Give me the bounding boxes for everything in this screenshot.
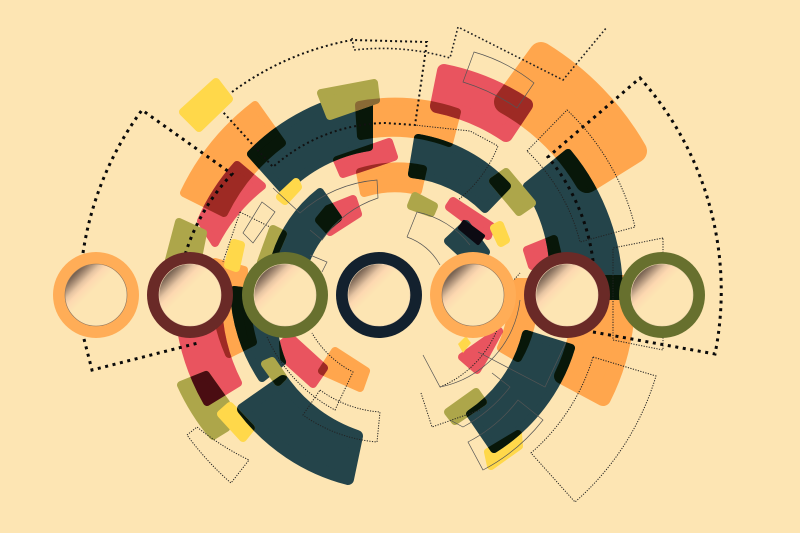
- orange arc bands: [184, 54, 635, 398]
- yellow arc block lower left: [221, 406, 251, 438]
- olive arc blocks: [169, 172, 532, 436]
- ring 7 olive: [619, 252, 705, 338]
- thick dotted sector left: [83, 110, 232, 370]
- ring 5 orange: [430, 252, 516, 338]
- thick dotted sector right: [548, 78, 721, 354]
- thin dotted outline sectors: [187, 110, 663, 502]
- medium dotted sector top: [223, 40, 427, 167]
- black overlap of inner teal and red: [460, 222, 483, 243]
- ring 2 maroon: [147, 252, 233, 338]
- ring 3 olive: [242, 252, 328, 338]
- upper olive and yellow blocks: [183, 82, 506, 353]
- medium dotted path top right: [352, 27, 607, 80]
- yellow arc block lower right: [488, 434, 519, 466]
- dark teal arc bands: [234, 94, 619, 479]
- red arc bands: [178, 71, 558, 402]
- ring 6 maroon: [524, 252, 610, 338]
- infographic canvas: [53, 26, 723, 502]
- dark red overlaps: [203, 84, 533, 376]
- black overlaps: [231, 106, 622, 453]
- brown overlap of olive and orange: [355, 98, 380, 112]
- ring 1 orange: [53, 252, 139, 338]
- thin outline blocks: [243, 52, 566, 470]
- ring 4 navy: [336, 252, 422, 338]
- maroon overlap of red and olive: [190, 370, 226, 406]
